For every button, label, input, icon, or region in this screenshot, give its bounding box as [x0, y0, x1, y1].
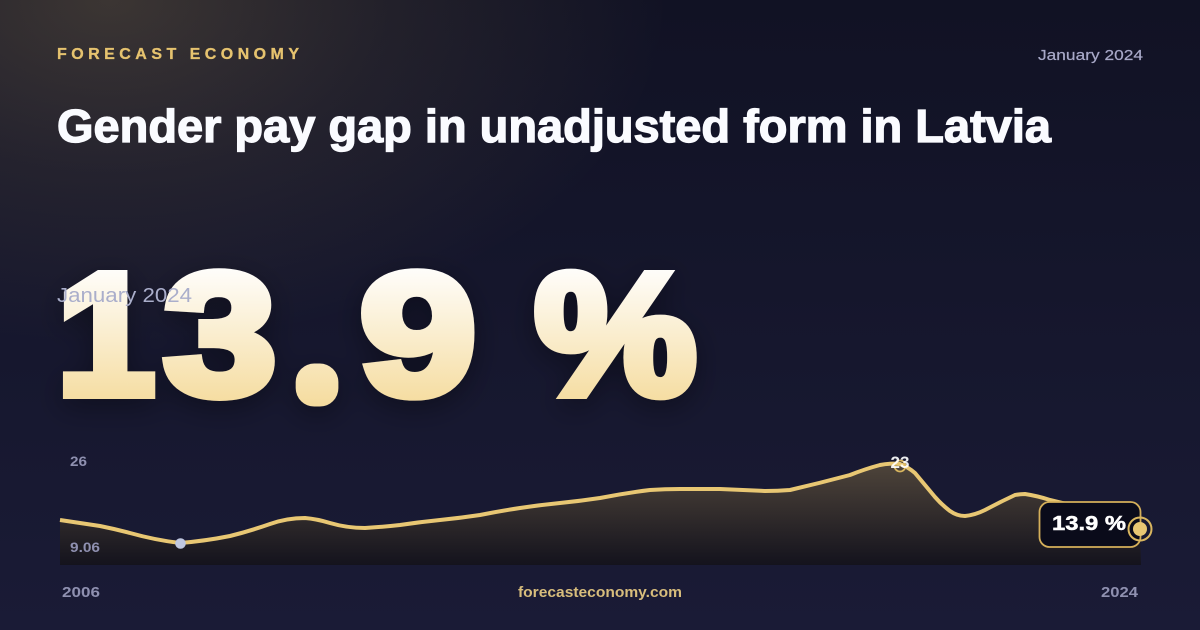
end marker: [1128, 518, 1152, 540]
big value: .: [311, 353, 323, 397]
date overlay: January 2024: [57, 285, 192, 307]
big value: 9: [360, 237, 476, 431]
peak marker: [894, 460, 906, 472]
big value: 1: [57, 239, 155, 432]
line chart: [60, 453, 1152, 565]
trend line: [60, 464, 1140, 543]
title: Gender pay gap in unadjusted form in Latvia: [57, 100, 1051, 152]
area under line: [60, 464, 1141, 565]
peak label: 23: [891, 453, 909, 472]
website: forecasteconomy.com: [518, 585, 682, 601]
big value: 3: [164, 238, 276, 431]
date top right: January 2024: [1038, 47, 1143, 64]
brand heading: FORECAST ECONOMY: [57, 46, 299, 63]
axis min label: 9.06: [70, 539, 100, 555]
big value: %: [535, 237, 696, 431]
value badge: 13.9 %: [1052, 513, 1126, 535]
end year: 2024: [1101, 585, 1138, 601]
big value: [57, 237, 696, 432]
start year: 2006: [62, 585, 100, 601]
axis max label: 26: [70, 453, 87, 469]
minimum marker: [175, 538, 186, 549]
value badge: [1040, 502, 1140, 547]
